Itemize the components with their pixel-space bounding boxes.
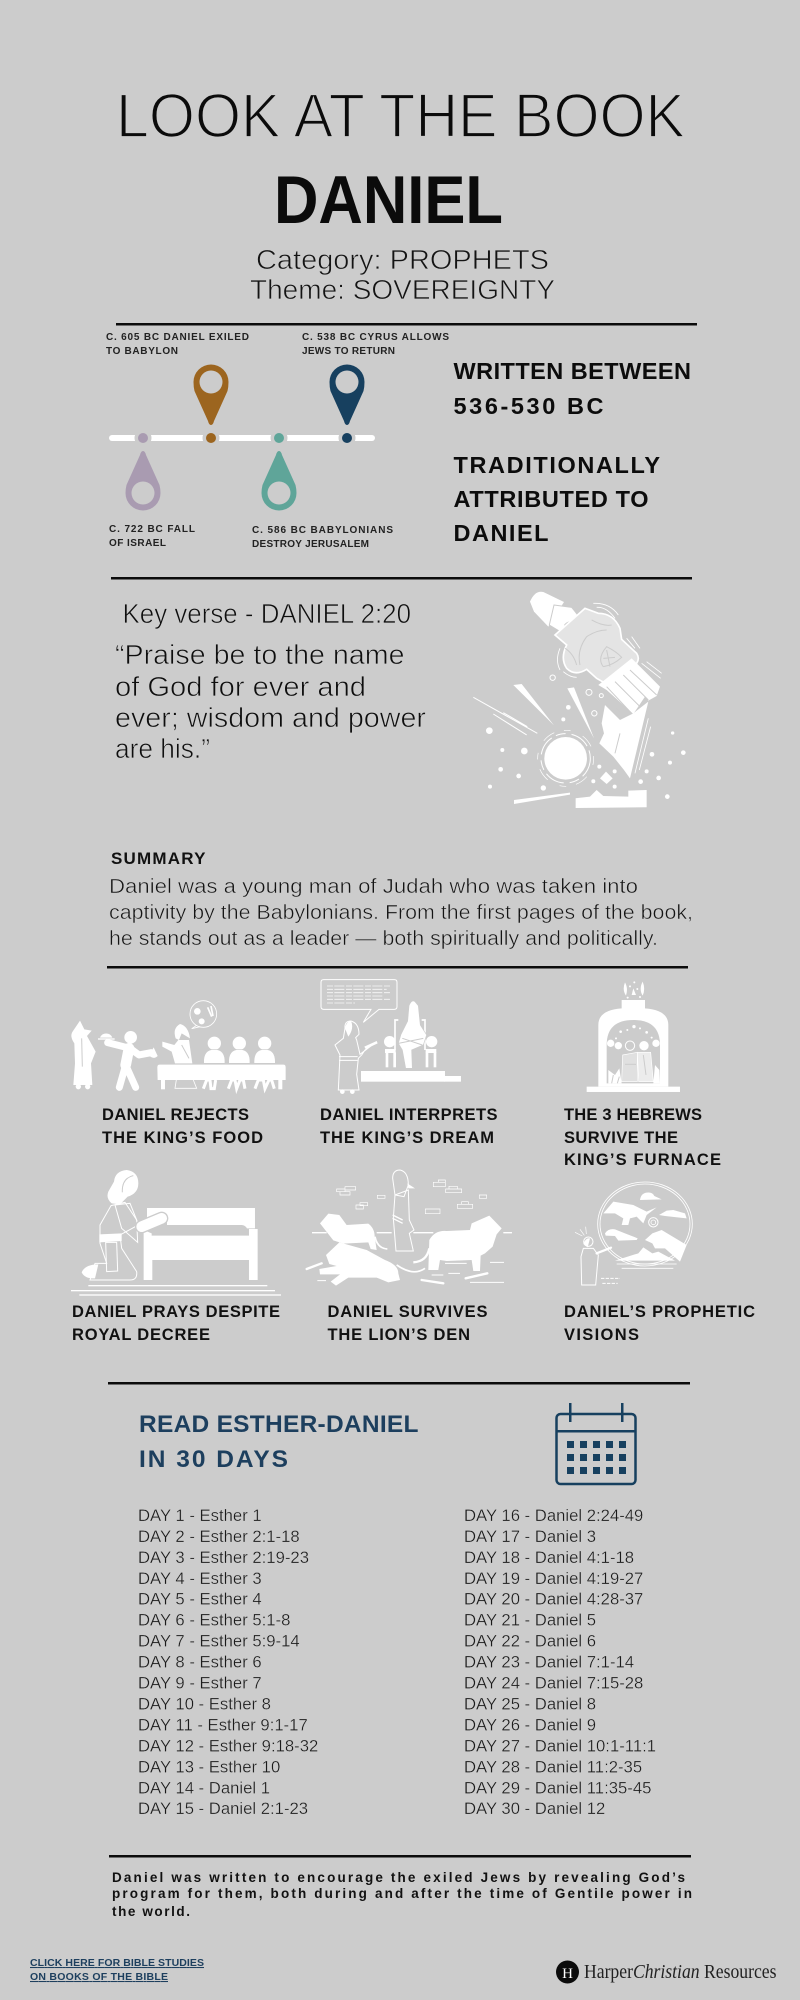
- reading list: days 1-15: DAY 3 - Esther 2:19-23: [138, 1548, 309, 1567]
- summary body: captivity by the Babylonians. From the first pages of the book,: [109, 902, 693, 924]
- caption: visions: DANIEL’S PROPHETIC: [564, 1303, 755, 1321]
- reading list: days 16-30: DAY 24 - Daniel 7:15-28: [464, 1674, 643, 1692]
- key verse quote: of God for ever and: [115, 671, 366, 702]
- closing statement: the world.: [112, 1904, 190, 1919]
- reading list: days 1-15: DAY 8 - Esther 6: [138, 1652, 262, 1672]
- link: bible studies: CLICK HERE FOR BIBLE STUDIES: [30, 1957, 204, 1969]
- bones: [307, 1263, 487, 1283]
- reading list: days 1-15: DAY 13 - Esther 10: [138, 1758, 280, 1776]
- reading list: days 1-15: DAY 11 - Esther 9:1-17: [138, 1716, 308, 1734]
- reading list: days 1-15: DAY 2 - Esther 2:1-18: [138, 1527, 300, 1546]
- reading list: days 1-15: DAY 12 - Esther 9:18-32: [138, 1736, 318, 1756]
- reading list: days 1-15: DAY 10 - Esther 8: [138, 1694, 271, 1714]
- title: LOOK AT THE BOOK: [116, 82, 685, 151]
- story captions: [72, 1106, 755, 1344]
- logo: HarperChristian Resources: H: [562, 1966, 573, 1982]
- icon: calendar: [556, 1403, 636, 1484]
- reading list: days 16-30: DAY 26 - Daniel 9: [464, 1716, 596, 1734]
- furnace opening: [607, 1020, 660, 1083]
- reading list: days 16-30: DAY 18 - Daniel 4:1-18: [464, 1548, 634, 1567]
- title: [116, 82, 685, 238]
- left lion: [320, 1214, 377, 1250]
- summary body: he stands out as a leader — both spiritually and politically.: [109, 928, 658, 950]
- bed: [147, 1208, 255, 1228]
- timeline markers: [134, 430, 356, 446]
- thought bubble: [190, 1001, 217, 1027]
- caption: furnace: KING’S FURNACE: [564, 1151, 721, 1169]
- link: bible studies: ON BOOKS OF THE BIBLE: [30, 1971, 168, 1983]
- statue body: [555, 608, 638, 685]
- label: 722 BC: C. 722 BC FALL: [109, 524, 195, 535]
- right lion: [428, 1216, 502, 1271]
- pin: 605 BC: [194, 364, 228, 425]
- reading list: days 1-15: DAY 14 - Daniel 1: [138, 1778, 270, 1798]
- key verse quote: are his.”: [115, 733, 210, 764]
- icon: lion's den: [307, 1170, 512, 1286]
- caption: lions: DANIEL SURVIVES: [328, 1303, 488, 1321]
- pin: 722 BC: [126, 451, 160, 510]
- key verse heading: Key verse - DANIEL 2:20: [122, 598, 411, 629]
- reading list: days 1-15: DAY 15 - Daniel 2:1-23: [138, 1799, 308, 1818]
- traditionally attributed: TRADITIONALLY: [454, 452, 660, 478]
- label: 586 BC: DESTROY JERUSALEM: [252, 539, 369, 550]
- traditionally attributed: ATTRIBUTED TO: [454, 486, 648, 512]
- traditionally attributed: [454, 452, 660, 546]
- written between: 536-530 BC: [454, 393, 604, 419]
- reading list: days 16-30: DAY 19 - Daniel 4:19-27: [464, 1569, 643, 1588]
- icon: prophetic visions: [575, 1182, 692, 1285]
- reading list: days 16-30: DAY 30 - Daniel 12: [464, 1799, 605, 1818]
- steps: [361, 1071, 445, 1082]
- label: 722 BC: OF ISRAEL: [109, 538, 166, 549]
- caption: interprets dream: DANIEL INTERPRETS: [320, 1106, 498, 1124]
- floor line: [312, 1231, 512, 1235]
- label: 605 BC: TO BABYLON: [106, 346, 178, 357]
- chimney flames: [624, 982, 644, 996]
- caption: prays: ROYAL DECREE: [72, 1326, 210, 1344]
- timeline: [106, 332, 449, 550]
- traditionally attributed: DANIEL: [454, 520, 548, 546]
- caption: rejects food: DANIEL REJECTS: [102, 1106, 249, 1124]
- ram: [645, 1230, 687, 1262]
- arm: [142, 1218, 162, 1227]
- headcloth: [108, 1170, 138, 1204]
- figures in the fire: [625, 1041, 635, 1050]
- caption: prays: DANIEL PRAYS DESPITE: [72, 1303, 280, 1321]
- mountains: [615, 1247, 675, 1261]
- reading list: days 16-30: DAY 28 - Daniel 11:2-35: [464, 1758, 642, 1776]
- reading list: days 1-15: DAY 1 - Esther 1: [138, 1506, 262, 1525]
- reading list: days 16-30: DAY 29 - Daniel 11:35-45: [464, 1778, 651, 1798]
- caption: furnace: SURVIVE THE: [564, 1129, 678, 1147]
- icon: furnace: [587, 981, 680, 1092]
- furnace body: [598, 1000, 668, 1087]
- Daniel standing: [393, 1170, 408, 1197]
- reading list: days 16-30: [464, 1506, 656, 1818]
- reading list: days 1-15: DAY 9 - Esther 7: [138, 1674, 262, 1692]
- closing statement: [112, 1870, 692, 1919]
- label: 586 BC: C. 586 BC BABYLONIANS: [252, 525, 393, 536]
- written between: [454, 358, 691, 419]
- rubble pieces: [576, 790, 647, 808]
- summary body: [109, 876, 693, 950]
- title: DANIEL: [274, 162, 503, 238]
- caption: rejects food: THE KING’S FOOD: [102, 1129, 263, 1147]
- reading list: days 1-15: DAY 5 - Esther 4: [138, 1590, 262, 1608]
- reading list: days 16-30: DAY 20 - Daniel 4:28-37: [464, 1590, 643, 1608]
- icon: Daniel rejects the king's food: [71, 1001, 286, 1089]
- reading plan heading: [139, 1411, 419, 1473]
- category and theme: [250, 244, 555, 305]
- key verse quote: ever; wisdom and power: [115, 702, 426, 733]
- closing statement: program for them, both during and after the time of Gentile power in: [112, 1886, 692, 1901]
- reading list: days 16-30: DAY 17 - Daniel 3: [464, 1527, 596, 1546]
- summary heading: SUMMARY: [111, 849, 206, 868]
- logo: HarperChristian Resources: HarperChristian Resources: [584, 1961, 777, 1983]
- category and theme: Category: PROPHETS: [256, 244, 549, 275]
- label: 605 BC: C. 605 BC DANIEL EXILED: [106, 332, 249, 343]
- reading list: days 1-15: DAY 7 - Esther 5:9-14: [138, 1632, 300, 1650]
- reading plan heading: READ ESTHER-DANIEL: [139, 1411, 419, 1438]
- timeline bar: [109, 435, 375, 441]
- prophet: [584, 1237, 593, 1246]
- illustration: statue struck by stone: [473, 592, 686, 808]
- body outline: [90, 1202, 138, 1280]
- Daniel outline: [335, 1021, 377, 1090]
- speech bubble: [321, 980, 397, 1022]
- clouds: [640, 1192, 662, 1200]
- summary body: Daniel was a young man of Judah who was taken into: [109, 876, 638, 898]
- reading list: days 16-30: DAY 22 - Daniel 6: [464, 1632, 596, 1650]
- icon: Daniel prays: [71, 1170, 281, 1296]
- reading list: days 16-30: DAY 21 - Daniel 5: [464, 1610, 596, 1630]
- crumbling lower legs: [599, 702, 648, 778]
- statue legs: [598, 658, 660, 714]
- label: 538 BC: JEWS TO RETURN: [302, 346, 395, 357]
- bricks: [337, 1180, 487, 1214]
- reading list: days 16-30: DAY 25 - Daniel 8: [464, 1694, 596, 1714]
- Daniel at table: [175, 1024, 190, 1040]
- reading list: days 1-15: [138, 1506, 318, 1818]
- caption: visions: VISIONS: [564, 1326, 639, 1344]
- pin: 586 BC: [262, 451, 296, 510]
- table: [157, 1065, 286, 1080]
- king figure: [71, 1021, 96, 1085]
- reading list: days 16-30: DAY 23 - Daniel 7:1-14: [464, 1652, 634, 1672]
- front lion: [319, 1242, 400, 1286]
- reading list: days 1-15: DAY 6 - Esther 5:1-8: [138, 1610, 290, 1630]
- goat: [603, 1202, 657, 1225]
- reading plan heading: IN 30 DAYS: [139, 1446, 288, 1473]
- reading list: days 1-15: DAY 4 - Esther 3: [138, 1569, 262, 1588]
- throne and king: [385, 1049, 396, 1053]
- written between: WRITTEN BETWEEN: [454, 358, 691, 384]
- key verse quote: [115, 639, 426, 764]
- reading list: days 16-30: DAY 27 - Daniel 10:1-11:1: [464, 1736, 656, 1756]
- caption: interprets dream: THE KING’S DREAM: [320, 1129, 494, 1147]
- statue head: [530, 592, 564, 627]
- motion streaks: [513, 684, 554, 725]
- reading list: days 16-30: DAY 16 - Daniel 2:24-49: [464, 1506, 643, 1525]
- servant with platter: [124, 1031, 137, 1044]
- category and theme: Theme: SOVEREIGNTY: [250, 274, 555, 305]
- vision ring: [598, 1182, 692, 1266]
- caption: lions: THE LION’S DEN: [328, 1326, 470, 1344]
- closing statement: Daniel was written to encourage the exiled Jews by revealing God’s: [112, 1870, 685, 1885]
- stone: [544, 737, 587, 780]
- summary: [109, 849, 693, 950]
- seated diners: [208, 1037, 221, 1050]
- floor lines: [88, 1285, 267, 1286]
- caption: furnace: THE 3 HEBREWS: [564, 1106, 702, 1124]
- pin: 538 BC: [330, 364, 364, 425]
- key verse quote: “Praise be to the name: [115, 639, 404, 670]
- icon: Daniel interprets the king's dream: [321, 980, 461, 1094]
- label: 538 BC: C. 538 BC CYRUS ALLOWS: [302, 332, 449, 343]
